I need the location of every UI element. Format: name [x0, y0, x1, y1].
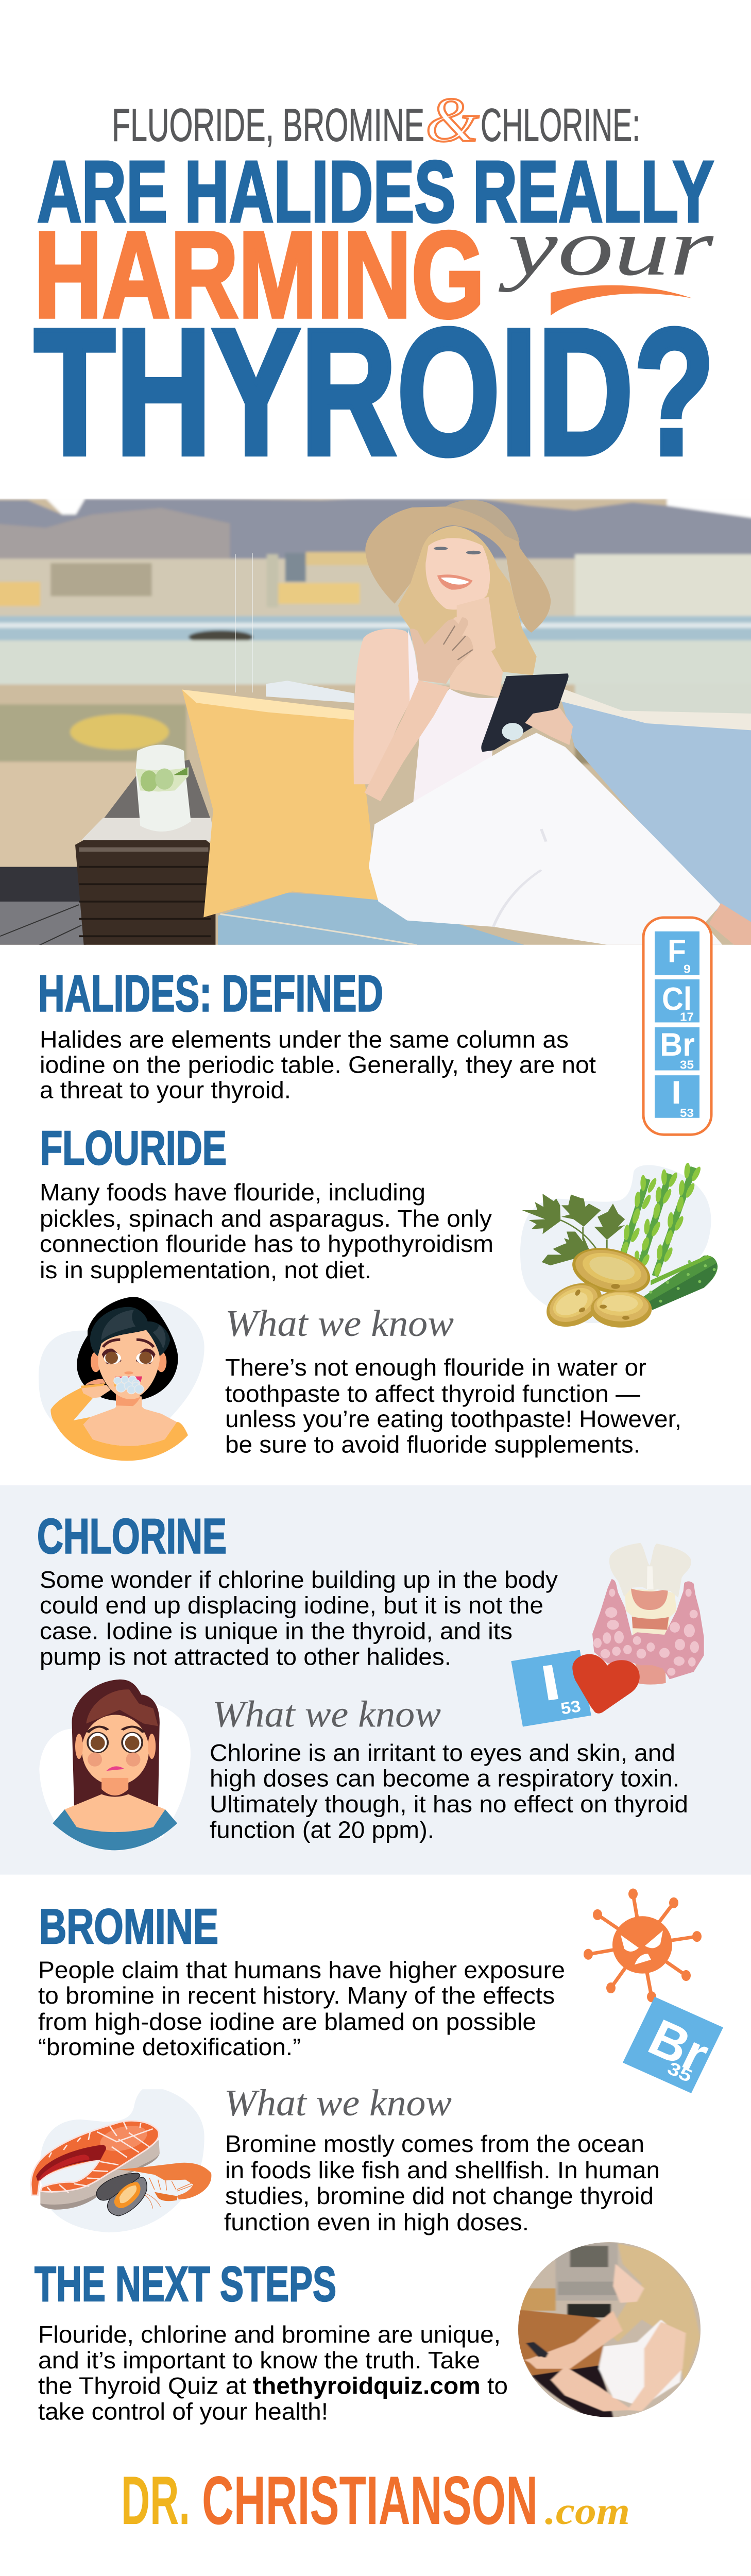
glass panel edges [235, 553, 252, 692]
what we know text [225, 1354, 681, 1458]
desert background with glass reflections [0, 495, 751, 980]
left potato [539, 1275, 610, 1335]
body text [40, 1026, 596, 1103]
parsley [522, 1194, 625, 1265]
what we know text: toothpaste to affect thyroid function — [225, 1380, 641, 1407]
what we know text: There’s not enough flouride in water or [225, 1354, 646, 1381]
yellow pillow [182, 689, 379, 918]
forearm [365, 681, 450, 801]
what we know text: Bromine mostly comes from the ocean [225, 2130, 644, 2157]
hand on tablet [525, 707, 573, 745]
panel: halides defined [38, 918, 711, 1134]
tile: Cl: Cl [662, 980, 692, 1017]
salmon dark meat [36, 2145, 106, 2181]
hero photo: woman on rooftop sofa [0, 495, 751, 980]
what we know text: function (at 20 ppm). [210, 1816, 434, 1843]
neck [116, 1393, 142, 1408]
wicker side table [75, 759, 215, 946]
headline line 2: HARMING [34, 206, 485, 343]
script word: your: your [498, 202, 714, 292]
subtitle: & [425, 85, 479, 155]
icon: vegetables [520, 1162, 718, 1335]
body text: Halides are elements under the same column as [40, 1026, 569, 1053]
heading: HALIDES: DEFINED [38, 965, 383, 1022]
thyroid lobes [592, 1579, 704, 1679]
heading: FLOURIDE [40, 1122, 227, 1175]
logo: dr. christianson .com: .com [545, 2490, 630, 2533]
what we know text [224, 2130, 660, 2235]
tile: F: F [668, 933, 686, 969]
body text: and it’s important to know the truth. Take [38, 2347, 480, 2374]
body text: Flouride, chlorine and bromine are unique, [38, 2321, 501, 2348]
icon: woman with irritated skin [39, 1680, 191, 1850]
woman [353, 500, 751, 946]
what we know text [210, 1739, 688, 1843]
body text: to bromine in recent history. Many of the effects [38, 1982, 555, 2009]
body text: a threat to your thyroid. [40, 1076, 291, 1103]
lobe highlights [593, 1589, 699, 1676]
eyes [434, 547, 481, 554]
tile: I: 53 [680, 1106, 694, 1120]
what we know heading: What we know [224, 2083, 452, 2124]
tile: Br [655, 1026, 699, 1072]
icon: seafood [31, 2089, 211, 2232]
tile: I [655, 1074, 699, 1120]
body text [40, 1179, 493, 1283]
heading: THE NEXT STEPS [35, 2256, 336, 2312]
shrimp [117, 2163, 211, 2201]
adam's apple [631, 1588, 668, 1610]
icon: bromine tile: Br [640, 2008, 718, 2083]
heading: BROMINE [39, 1899, 218, 1954]
smile [437, 574, 473, 590]
body text: could end up displacing iodine, but it is not the [40, 1592, 543, 1619]
foam [114, 1376, 144, 1394]
mussel [96, 2173, 161, 2216]
subtitle [112, 85, 640, 155]
salmon stripes [47, 2122, 153, 2193]
body text [38, 1956, 565, 2060]
panel: the next steps [35, 2242, 701, 2425]
tile: I: I [671, 1074, 681, 1111]
tank top [408, 630, 499, 802]
icon: bromine tile [623, 1997, 723, 2093]
asparagus leaves [620, 1162, 702, 1277]
body text: pickles, spinach and asparagus. The only [40, 1205, 492, 1232]
periodic table column [643, 918, 711, 1134]
what we know text: Chlorine is an irritant to eyes and skin, and [210, 1739, 675, 1766]
face [425, 538, 490, 609]
heading: CHLORINE [37, 1508, 227, 1564]
large potato [567, 1240, 656, 1302]
shoulder and arm [353, 629, 416, 784]
heart [572, 1654, 640, 1714]
body text: iodine on the periodic table. Generally, they are not [40, 1051, 596, 1078]
hat [365, 500, 551, 633]
body text: take control of your health! [38, 2398, 328, 2425]
body text: connection flouride has to hypothyroidism [40, 1230, 493, 1257]
hand with toothbrush [86, 1379, 106, 1385]
asparagus stems [623, 1167, 694, 1276]
neck lower [456, 597, 496, 651]
title [34, 85, 715, 493]
body text: Some wonder if chlorine building up in the body [40, 1566, 558, 1593]
tile: F: 9 [684, 962, 691, 975]
cartilage [609, 1543, 691, 1598]
tile: Cl [655, 979, 699, 1023]
body text [38, 2321, 508, 2425]
cucumber [642, 1256, 718, 1310]
right potato [591, 1291, 652, 1328]
icon: bromine tile: 35 [664, 2058, 695, 2086]
what we know text: studies, bromine did not change thyroid [225, 2182, 654, 2209]
white trousers and foot [369, 733, 751, 946]
panel: chlorine [0, 1485, 751, 1875]
logo: dr. christianson .com [121, 2462, 630, 2539]
subtitle: CHLORINE: [481, 99, 640, 151]
salmon flesh [31, 2121, 159, 2195]
icon: thyroid with iodine tile and heart [511, 1543, 704, 1727]
sofa [218, 681, 751, 946]
panel background [0, 1485, 751, 1875]
hand at throat [409, 617, 473, 684]
what we know text: unless you’re eating toothpaste! However, [225, 1405, 681, 1432]
what we know text: Ultimately though, it has no effect on thyroid [210, 1791, 688, 1817]
what we know heading: What we know [212, 1694, 441, 1735]
pop socket [502, 723, 523, 740]
chest [83, 1405, 177, 1446]
logo: dr. christianson .com: DR. [121, 2462, 190, 2539]
tile: Br: Br [660, 1026, 695, 1062]
body text: from high-dose iodine are blamed on possible [38, 2008, 536, 2035]
what we know text: in foods like fish and shellfish. In human [225, 2157, 660, 2183]
salmon skin edge [40, 2140, 160, 2209]
trachea [625, 1588, 676, 1636]
panel: bromine [31, 1889, 723, 2235]
swoosh [551, 285, 692, 316]
iodine tile: 53 [559, 1697, 582, 1718]
body text: the Thyroid Quiz at thethyroidquiz.com to [38, 2372, 508, 2399]
panel: flouride [39, 1122, 718, 1461]
body text: People claim that humans have higher exposure [38, 1956, 565, 1983]
photo: woman using phone in kitchen [517, 2242, 701, 2418]
shirt and arm [50, 1387, 188, 1461]
neck and chest [450, 617, 503, 698]
hair [398, 526, 537, 675]
body text: pump is not attracted to other halides. [40, 1643, 451, 1670]
body text [40, 1566, 558, 1670]
what we know text: function even in high doses. [224, 2209, 529, 2235]
icon: woman brushing teeth [39, 1297, 204, 1461]
iodine tile [511, 1650, 591, 1727]
what we know text: high doses can become a respiratory toxin. [210, 1765, 679, 1792]
cucumber water jar [135, 744, 191, 832]
subtitle: FLUORIDE, BROMINE [112, 99, 424, 151]
body text: “bromine detoxification.” [38, 2033, 301, 2060]
body text: Many foods have flouride, including [40, 1179, 425, 1206]
logo: dr. christianson .com: CHRISTIANSON [202, 2462, 538, 2539]
tile: F [655, 931, 699, 975]
tile: Br: 35 [680, 1058, 694, 1072]
what we know text: be sure to avoid fluoride supplements. [225, 1431, 640, 1458]
icon: angry virus [584, 1889, 702, 2002]
body text: is in supplementation, not diet. [40, 1257, 371, 1283]
tablet [481, 673, 569, 752]
what we know heading: What we know [225, 1303, 454, 1345]
tile: Cl: 17 [680, 1010, 694, 1023]
body text: case. Iodine is unique in the thyroid, and its [40, 1618, 513, 1644]
deck [0, 867, 86, 946]
